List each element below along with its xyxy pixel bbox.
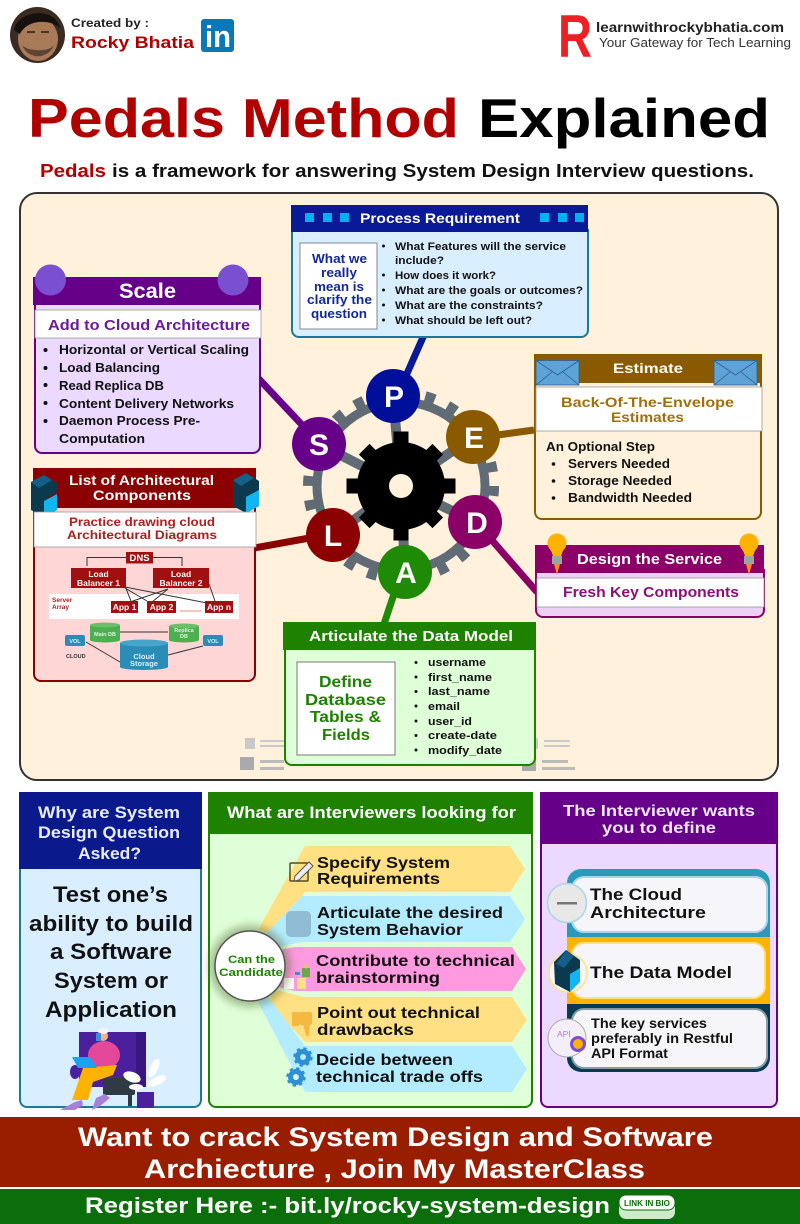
database: cloud storage xyxy=(120,640,168,670)
callout: define database tables: Define xyxy=(319,674,372,691)
subtitle: is a framework for answering System Design Interview questions. xyxy=(112,161,754,181)
field list: modify_date xyxy=(428,745,502,757)
box: load balancer 1: Balancer 1 xyxy=(77,578,120,588)
heading: Components xyxy=(93,487,191,503)
panel: list of architectural components xyxy=(31,468,259,681)
question list: What are the constraints? xyxy=(395,300,543,312)
heading: Estimate xyxy=(613,360,683,376)
database: main xyxy=(90,622,120,642)
scale list: Computation xyxy=(59,432,145,446)
icon: rounded square xyxy=(286,911,311,937)
callout: clarify the question xyxy=(300,243,377,329)
callout: can the candidate xyxy=(209,925,291,1007)
chart: cloud architecture diagram xyxy=(49,552,239,670)
heading: Design the Service xyxy=(577,552,722,568)
title: Pedals Method xyxy=(28,87,459,149)
icon: bulb left xyxy=(548,534,566,575)
question list: include? xyxy=(395,255,444,267)
label: server array xyxy=(52,597,73,611)
callout: clarify the question: really xyxy=(321,266,357,280)
database: replica: Replica xyxy=(174,628,195,634)
item: cloud architecture: Architecture xyxy=(590,903,706,922)
arrow: point out drawbacks xyxy=(268,990,527,1042)
scale list: Load Balancing xyxy=(59,361,160,375)
heading: Process Requirement xyxy=(360,210,520,226)
text: created by: Created by : xyxy=(71,16,149,30)
item: data model xyxy=(549,943,765,998)
field list: user_id xyxy=(428,716,472,728)
item: key services: preferably in Restful xyxy=(591,1031,733,1046)
estimate list: An Optional Step xyxy=(546,440,655,454)
banner: masterclass call to action: Want to crack System Design and Software xyxy=(78,1122,713,1152)
diagram links xyxy=(86,558,215,662)
box: load balancer 2 xyxy=(153,568,209,588)
box: DNS xyxy=(126,552,153,564)
field list: last_name xyxy=(428,686,490,698)
gear: hole xyxy=(389,474,413,498)
subheading band xyxy=(536,387,762,431)
icon: cube right xyxy=(233,473,259,513)
body text xyxy=(29,882,193,1022)
subheading band: Add to Cloud Architecture xyxy=(48,318,250,334)
question list xyxy=(382,241,583,327)
callout: can the candidate: Candidate xyxy=(219,967,283,979)
body text: Test one’s xyxy=(53,882,168,907)
subheading band: Architectural Diagrams xyxy=(67,528,217,542)
icon: R logo: R xyxy=(558,3,592,70)
node: P: P xyxy=(384,381,404,414)
question list: What Features will the service xyxy=(395,241,566,253)
arrow: articulate system behavior: Articulate the desired xyxy=(317,905,503,922)
arrow: point out drawbacks: drawbacks xyxy=(317,1022,414,1039)
icon: people brainstorming xyxy=(284,964,310,989)
item: data model: The Data Model xyxy=(590,963,732,982)
icon: API xyxy=(548,1019,586,1057)
heading: Design Question xyxy=(38,823,180,842)
decorative list: right xyxy=(522,738,575,771)
heading: Asked? xyxy=(78,844,141,863)
estimate list xyxy=(546,440,692,505)
node: A: A xyxy=(395,557,417,590)
icon: bulb right xyxy=(740,534,758,575)
banner: masterclass call to action xyxy=(0,1117,800,1187)
box: app 1: App 1 xyxy=(113,602,137,612)
callout: clarify the question: mean is xyxy=(314,280,364,294)
node: L: L xyxy=(324,520,342,553)
node: E: E xyxy=(464,422,484,455)
box: app 2: App 2 xyxy=(150,602,174,612)
scale list xyxy=(44,343,249,446)
callout: define database tables xyxy=(297,662,395,755)
node: A xyxy=(378,545,432,599)
icon: link in bio badge: LINK IN BIO xyxy=(624,1199,670,1208)
item: key services: API Format xyxy=(591,1046,669,1061)
banner: register link xyxy=(0,1189,800,1224)
scale list: Horizontal or Vertical Scaling xyxy=(59,343,249,357)
text: website: learnwithrockybhatia.com xyxy=(596,19,784,35)
volume right: VOL xyxy=(207,639,219,645)
item: cloud architecture: The Cloud xyxy=(590,885,682,904)
subheading band xyxy=(35,310,261,338)
estimate list: Bandwidth Needed xyxy=(568,491,692,505)
question list: How does it work? xyxy=(395,270,496,282)
icon: pencil note xyxy=(290,862,313,881)
panel: pedals method diagram xyxy=(20,193,778,780)
node: D xyxy=(448,495,502,549)
callout: define database tables: Tables & xyxy=(310,709,381,726)
body text: a Software xyxy=(50,939,172,964)
subheading band: Fresh Key Components xyxy=(563,585,739,601)
heading: Why are System xyxy=(38,803,180,822)
volume right xyxy=(203,635,223,646)
callout: define database tables: Database xyxy=(305,692,386,709)
arrow: specify system requirements xyxy=(258,846,525,935)
panel: scale xyxy=(33,264,261,453)
icon: link in bio badge xyxy=(619,1195,675,1219)
heading: Articulate the Data Model xyxy=(309,628,513,645)
gear: outer gray ring xyxy=(308,393,494,579)
item: key services: The key services xyxy=(591,1016,707,1031)
arrow: contribute to brainstorming xyxy=(270,947,526,991)
panel: what are interviewers looking for xyxy=(208,792,533,1107)
box: load balancer 2: Load xyxy=(171,569,191,579)
label: cloud: CLOUD xyxy=(66,654,86,660)
box: app 2 xyxy=(147,601,176,613)
stack band: navy xyxy=(567,1004,770,1072)
banner: register link: Register Here :- bit.ly/rocky-system-design xyxy=(85,1193,610,1218)
box: load balancer 2: Balancer 2 xyxy=(160,578,203,588)
database: cloud storage: Cloud xyxy=(133,652,155,661)
title xyxy=(28,87,770,149)
panel: why system design questions are asked xyxy=(19,792,202,1110)
database: main: Main DB xyxy=(94,632,116,638)
arrow: point out drawbacks: Point out technical xyxy=(317,1005,480,1022)
subheading band xyxy=(537,578,764,607)
node: S xyxy=(292,417,346,471)
icon: cube xyxy=(549,950,587,992)
panel: design the service xyxy=(535,534,764,617)
body text: Application xyxy=(45,997,177,1022)
node: L xyxy=(306,508,360,562)
icon: minus circle xyxy=(548,884,586,922)
icon: creator portrait xyxy=(10,7,65,63)
icon: cube left xyxy=(31,475,57,517)
box: DNS: DNS xyxy=(129,553,150,564)
field list: first_name xyxy=(428,672,492,684)
stack band: amber xyxy=(567,937,770,1004)
panel: estimate xyxy=(534,354,762,519)
volume left: VOL xyxy=(69,639,81,645)
subheading band xyxy=(34,512,256,547)
scale list: Content Delivery Networks xyxy=(59,397,234,411)
subheading band: Back-Of-The-Envelope xyxy=(561,394,734,410)
header squares xyxy=(305,213,584,222)
heading xyxy=(563,803,755,837)
callout: clarify the question: What we xyxy=(312,252,367,266)
field list: create-date xyxy=(428,730,497,742)
label: server array: Array xyxy=(52,604,69,611)
box: app n: App n xyxy=(207,602,231,612)
gear graphic xyxy=(308,393,494,579)
body text: System or xyxy=(54,968,168,993)
subheading band: Estimates xyxy=(611,409,684,425)
field list: email xyxy=(428,701,460,713)
database: replica: DB xyxy=(180,634,188,640)
arrow: decide trade offs: Decide between xyxy=(316,1052,453,1069)
question list: What are the goals or outcomes? xyxy=(395,285,583,297)
arrow: articulate system behavior xyxy=(262,896,525,948)
field list: username xyxy=(428,657,486,669)
text: tagline: Your Gateway for Tech Learning xyxy=(599,35,791,50)
icon: envelope right xyxy=(714,360,757,385)
callout: clarify the question: question xyxy=(311,307,367,321)
panel: the interviewer wants you to define xyxy=(540,792,778,1107)
subtitle: Pedals xyxy=(40,161,106,181)
node: E xyxy=(446,410,500,464)
heading: The Interviewer wants xyxy=(563,803,755,820)
arrow: contribute to brainstorming: Contribute to technical xyxy=(316,953,515,970)
arrow: specify system requirements: Requirements xyxy=(317,871,440,888)
scale list: Daemon Process Pre- xyxy=(59,414,200,428)
icon: LinkedIn: in xyxy=(205,19,231,54)
box: load balancer 1: Load xyxy=(88,569,109,579)
callout: define database tables: Fields xyxy=(322,727,370,744)
database: replica xyxy=(169,624,199,642)
callout: can the candidate: Can the xyxy=(228,954,275,966)
server array background xyxy=(49,594,239,619)
icon: envelope left xyxy=(536,360,579,385)
text: creator name: Rocky Bhatia xyxy=(71,33,195,52)
subheading band: Practice drawing cloud xyxy=(69,515,215,529)
header: creator xyxy=(10,7,234,63)
heading: List of Architectural xyxy=(69,472,214,488)
estimate list: Servers Needed xyxy=(568,457,670,471)
label: server array: Server xyxy=(52,597,73,604)
icon: gears xyxy=(288,1048,312,1086)
decorative list: left xyxy=(240,738,284,770)
arrow: articulate system behavior: System Behavior xyxy=(317,922,463,939)
icon: person with laptop xyxy=(60,1028,168,1110)
gear: inner black cog xyxy=(346,432,456,540)
arrow: contribute to brainstorming: brainstorming xyxy=(316,970,440,987)
database: cloud storage: Storage xyxy=(130,659,158,668)
item: cloud architecture xyxy=(548,877,767,932)
heading: What are Interviewers looking for xyxy=(227,804,517,822)
heading: Scale xyxy=(119,280,176,303)
title: Explained xyxy=(478,87,770,149)
stack band: teal xyxy=(567,869,770,937)
heading xyxy=(69,472,214,503)
body text: ability to build xyxy=(29,911,193,936)
node: D: D xyxy=(466,507,488,540)
question list: What should be left out? xyxy=(395,315,532,327)
arrow: decide trade offs: technical trade offs xyxy=(316,1069,483,1086)
box: load balancer 1 xyxy=(71,568,126,588)
scale list: Read Replica DB xyxy=(59,379,164,393)
arrow: specify system requirements: Specify System xyxy=(317,855,450,872)
callout: clarify the question: clarify the xyxy=(307,293,372,307)
estimate list: Storage Needed xyxy=(568,474,672,488)
volume left xyxy=(65,635,85,646)
banner: masterclass call to action: Archiecture , Join My MasterClass xyxy=(144,1154,645,1184)
heading xyxy=(38,803,180,863)
panel: articulate the data model xyxy=(283,622,536,765)
field list xyxy=(414,657,502,757)
icon: thumbs down xyxy=(292,1012,312,1036)
arrow: decide trade offs xyxy=(258,997,527,1092)
heading: you to define xyxy=(602,820,716,837)
item: key services xyxy=(548,1009,767,1068)
icon: API: API xyxy=(557,1029,571,1039)
header: brand logo xyxy=(558,3,791,70)
node: S: S xyxy=(309,429,329,462)
connector lines xyxy=(254,335,537,624)
panel: process requirement xyxy=(291,205,588,337)
node: P xyxy=(366,369,420,423)
header circles xyxy=(35,264,248,296)
